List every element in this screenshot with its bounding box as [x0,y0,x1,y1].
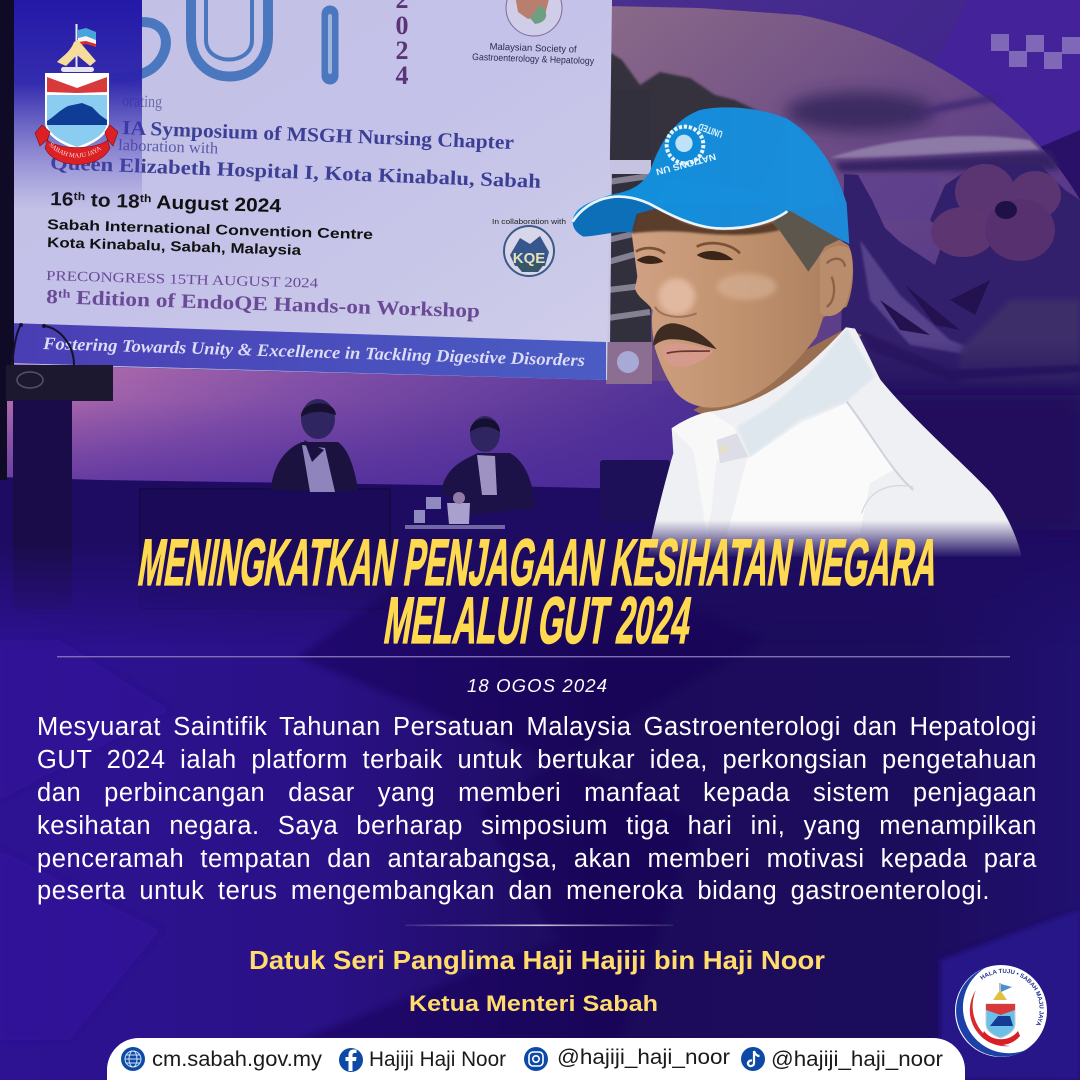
vertical year 2024: 2 [396,36,408,65]
UN emblem [667,127,703,163]
body paragraph: Mesyuarat Saintifik Tahunan Persatuan Malaysia Gastroenterologi dan Hepatologi [37,713,1037,741]
white shirt [647,327,1022,557]
hair [773,211,840,272]
projection screen: August 2024 [151,192,282,217]
icon: instagram [524,1047,548,1071]
vertical year 2024: 4 [396,61,408,90]
projection screen: th [73,191,86,203]
projection screen: 8 [46,286,57,308]
large GUT letters [115,0,372,78]
checkered decoration [991,34,1080,69]
flag [76,24,96,68]
signatory title: Ketua Menteri Sabah [409,991,658,1016]
Sabah state crest [34,24,118,165]
screen heading text: Queen Elizabeth Hospital I, Kota Kinabalu, Sabah [50,152,541,193]
screen heading text [50,91,541,193]
social links bar [107,1038,965,1080]
nose highlight [658,278,695,315]
MSGH society logo: Malaysian Society of [489,41,577,56]
screen heading text: orating [122,91,163,111]
shield [45,73,109,150]
vertical year 2024: 0 [396,11,408,40]
lower background panels [0,540,1080,1080]
body paragraph: peserta untuk terus mengembangkan dan meneroka bidang gastroenterologi. [37,877,990,905]
ear [820,246,852,316]
blue cap: NATIONS UN [655,151,717,177]
social links bar: cm.sabah.gov.my [152,1048,323,1071]
badge: Hala Tuju Sabah Maju Jaya: HALA TUJU • SABAH MAJU JAYA [980,968,1044,1026]
icon: tiktok [741,1047,765,1071]
face [632,207,853,408]
rafflesia flower [931,164,1061,261]
QE hospital logo: In collaboration with [492,217,566,226]
presenter left [271,399,358,492]
icon: website [121,1047,145,1071]
projection screen: Edition of EndoQE Hands-on Workshop [70,287,480,322]
screen heading text: laboration with [118,137,218,157]
projection screen: th [140,193,152,205]
QE hospital logo: KQE [513,250,545,267]
portrait: Datuk Seri Hajiji [573,107,1022,557]
signatory name: Datuk Seri Panglima Haji Hajiji bin Haji Noor [249,945,825,975]
QE hospital logo [492,217,566,276]
white brim piping [573,197,787,229]
blue cap [573,107,849,244]
mouth [662,343,713,367]
projection screen: to 18 [85,190,140,213]
projection screen: PRECONGRESS 15TH AUGUST 2024 [46,269,318,292]
screen footer banner: Fostering Towards Unity & Excellence in Tackling Digestive Disorders [42,333,585,370]
neck [693,328,862,427]
headline: MELALUI GUT 2024 [380,584,696,658]
social links bar: @hajiji_haji_noor [557,1046,730,1069]
social links bar: @hajiji_haji_noor [771,1048,943,1071]
arms [57,40,96,66]
headline [134,526,943,658]
projection screen: Kota Kinabalu, Sabah, Malaysia [47,234,302,258]
forehead shadow under brim [632,207,780,235]
projection screen: 16 [50,189,72,211]
screen heading text: IA Symposium of MSGH Nursing Chapter [122,117,514,154]
eyes [637,256,663,264]
body paragraph: penceramah tempatan dan antarabangsa, akan memberi motivasi kepada para [37,845,1037,873]
blue cap: UNITED [697,120,724,139]
vertical year 2024 [396,0,408,90]
projection screen: Sabah International Convention Centre [47,216,374,242]
badge: Hala Tuju Sabah Maju Jaya [955,965,1047,1057]
body paragraph: kesihatan negara. Saya berharap simposium tiga hari ini, yang menampilkan [37,812,1037,840]
projection screen: th [58,286,71,301]
blue corner overlay [14,0,142,210]
presenter right [441,416,535,515]
red ribbon [34,124,118,165]
MSGH society logo: Gastroenterology & Hepatology [472,52,594,67]
social links bar: Hajiji Haji Noor [369,1048,506,1071]
right backdrop: sky and mountains [606,0,1080,410]
table items [405,492,505,529]
red ribbon: SABAH MAJU JAYA [49,142,102,158]
body paragraph [37,713,1037,905]
mountain photo tile beside screen [606,342,652,384]
stage and lectern [0,0,680,620]
projection screen [0,0,612,380]
portrait base fade [630,520,1050,558]
body paragraph: GUT 2024 ialah platform terbaik untuk bertukar idea, perkongsian pengetahuan [37,746,1037,774]
moustache [653,323,717,349]
date: 18 OGOS 2024 [467,675,607,696]
MSGH society logo [472,0,594,67]
auditorium wall [0,364,1080,530]
screen footer banner [7,323,606,380]
icon: facebook [339,1048,363,1072]
body paragraph: dan perbincangan dasar yang memberi manfaat kepada sistem penjagaan [37,779,1037,807]
mountain range [840,165,1080,400]
